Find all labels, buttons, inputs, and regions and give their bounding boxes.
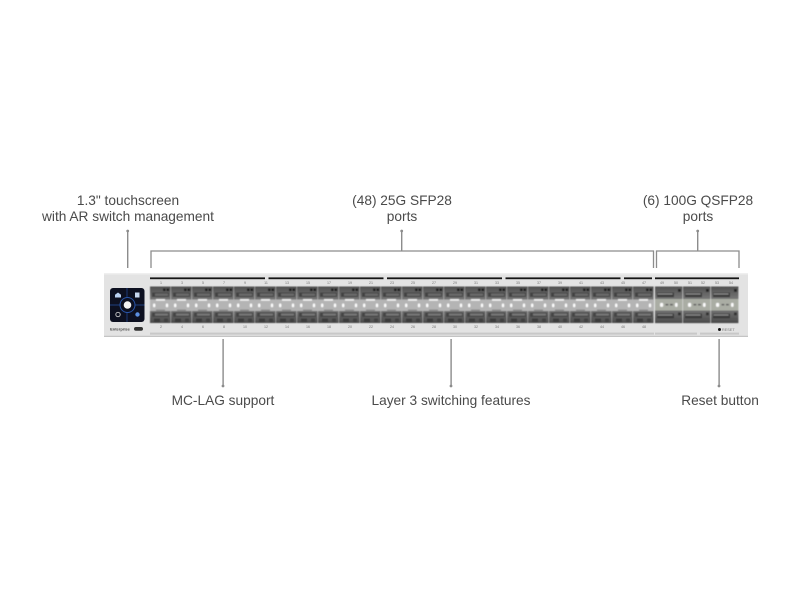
- top port numbers: 11: [264, 281, 268, 285]
- bottom port numbers: 30: [453, 325, 457, 329]
- callout: SFP28 ports: [151, 193, 654, 268]
- bottom port numbers: 32: [474, 325, 478, 329]
- top port numbers: 17: [327, 281, 331, 285]
- bottom port numbers: 20: [348, 325, 352, 329]
- reset button: RESET: [722, 328, 735, 332]
- callout: touchscreen: with AR switch management: [41, 209, 214, 224]
- bottom port numbers: 8: [223, 325, 225, 329]
- top port numbers: 53: [715, 281, 719, 285]
- bottom port numbers: 26: [411, 325, 415, 329]
- top port numbers: [160, 281, 733, 285]
- callout: MC-LAG support: MC-LAG support: [172, 393, 275, 408]
- bottom port numbers: 14: [285, 325, 289, 329]
- top port numbers: 33: [495, 281, 499, 285]
- callout: reset button: [681, 339, 759, 408]
- bottom port numbers: 10: [243, 325, 247, 329]
- callout: SFP28 ports: (48) 25G SFP28: [352, 193, 452, 208]
- top port numbers: 35: [516, 281, 520, 285]
- top port numbers: 37: [537, 281, 541, 285]
- bottom port numbers: 18: [327, 325, 331, 329]
- callout: touchscreen: 1.3" touchscreen: [77, 193, 179, 208]
- top port numbers: 25: [411, 281, 415, 285]
- top port numbers: 41: [579, 281, 583, 285]
- top port numbers: 19: [348, 281, 352, 285]
- QSFP28 port array: [655, 286, 738, 323]
- top port numbers: 3: [181, 281, 183, 285]
- top port numbers: 49: [660, 281, 664, 285]
- callout: SFP28 ports: ports: [387, 209, 417, 224]
- callout: QSFP28 ports: (6) 100G QSFP28: [643, 193, 754, 208]
- top port numbers: 7: [223, 281, 225, 285]
- top port numbers: 50: [674, 281, 678, 285]
- top port numbers: 51: [688, 281, 692, 285]
- callout: QSFP28 ports: ports: [683, 209, 713, 224]
- callout: Layer 3 switching: Layer 3 switching features: [371, 393, 531, 408]
- SFP28 port array: [150, 286, 654, 323]
- top port numbers: 5: [202, 281, 204, 285]
- bottom port numbers: 44: [600, 325, 604, 329]
- brand label: Enterprise: [110, 326, 131, 332]
- bottom port numbers: 38: [537, 325, 541, 329]
- port activity bars: [150, 277, 739, 279]
- bottom port numbers: 40: [558, 325, 562, 329]
- top port numbers: 15: [306, 281, 310, 285]
- top port numbers: 47: [642, 281, 646, 285]
- top port numbers: 39: [558, 281, 562, 285]
- touchscreen display: [110, 288, 144, 322]
- bottom port numbers: 28: [432, 325, 436, 329]
- top port numbers: 29: [453, 281, 457, 285]
- top port numbers: 27: [432, 281, 436, 285]
- bottom port numbers: 42: [579, 325, 583, 329]
- bottom port numbers: [160, 325, 646, 329]
- bottom port numbers: 4: [181, 325, 183, 329]
- top port numbers: 31: [474, 281, 478, 285]
- top port numbers: 1: [160, 281, 162, 285]
- top port numbers: 52: [701, 281, 705, 285]
- bottom port numbers: 12: [264, 325, 268, 329]
- top port numbers: 54: [729, 281, 733, 285]
- switch chassis: [104, 273, 748, 337]
- top port numbers: 45: [621, 281, 625, 285]
- bottom port numbers: 36: [516, 325, 520, 329]
- bottom chassis strip: [150, 333, 739, 335]
- bottom port numbers: 6: [202, 325, 204, 329]
- top port numbers: 23: [390, 281, 394, 285]
- callout: reset button: Reset button: [681, 393, 759, 408]
- top port numbers: 9: [244, 281, 246, 285]
- brand label: [110, 326, 143, 332]
- bottom port numbers: 46: [621, 325, 625, 329]
- callout: QSFP28 ports: [643, 193, 754, 268]
- bottom port numbers: 22: [369, 325, 373, 329]
- bottom port numbers: 24: [390, 325, 394, 329]
- top port numbers: 13: [285, 281, 289, 285]
- top port numbers: 43: [600, 281, 604, 285]
- callout: MC-LAG support: [172, 339, 275, 408]
- bottom port numbers: 2: [160, 325, 162, 329]
- bottom port numbers: 16: [306, 325, 310, 329]
- bottom port numbers: 34: [495, 325, 499, 329]
- top port numbers: 21: [369, 281, 373, 285]
- bottom port numbers: 48: [642, 325, 646, 329]
- callout: touchscreen: [41, 193, 214, 268]
